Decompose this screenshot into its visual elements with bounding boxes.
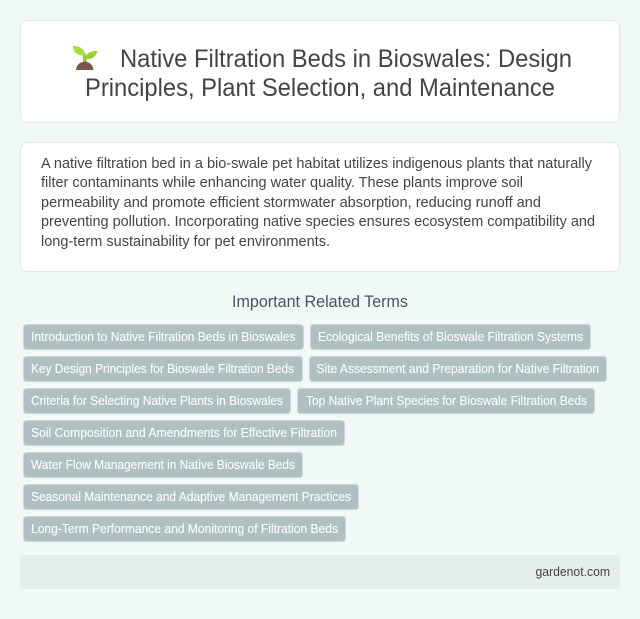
description text: long-term sustainability for pet environments.	[41, 233, 330, 250]
title line 1: Native Filtration Beds in Bioswales: Design	[120, 45, 572, 73]
description text: preventing pollution. Incorporating native species ensures ecosystem compatibility and	[41, 213, 595, 230]
description text: A native filtration bed in a bio-swale pet habitat utilizes indigenous plants that naturally	[41, 155, 592, 172]
description text: permeability and promote efficient stormwater absorption, reducing runoff and	[41, 194, 541, 211]
tag	[310, 356, 606, 382]
tag: Long-Term Performance and Monitoring of Filtration Beds	[31, 521, 338, 536]
footer text: gardenot.com	[536, 564, 610, 579]
tag	[24, 388, 290, 414]
footer bar	[20, 555, 620, 589]
tag	[298, 388, 594, 414]
tag	[24, 452, 302, 478]
tag: Top Native Plant Species for Bioswale Filtration Beds	[306, 393, 587, 408]
tag: Key Design Principles for Bioswale Filtration Beds	[31, 361, 294, 376]
heading: important related terms: Important Related Terms	[232, 293, 408, 311]
tag: Water Flow Management in Native Bioswale Beds	[31, 457, 295, 472]
tag	[310, 324, 590, 350]
panel: term tags	[24, 324, 606, 542]
description text	[41, 155, 595, 250]
tag: Soil Composition and Amendments for Effective Filtration	[31, 425, 337, 440]
tag	[24, 516, 346, 542]
tag: Site Assessment and Preparation for Native Filtration	[316, 361, 599, 376]
tag: Ecological Benefits of Bioswale Filtration Systems	[318, 329, 583, 344]
title line 2: Principles, Plant Selection, and Maintenance	[85, 74, 555, 102]
description text: filter contaminants while enhancing water quality. These plants improve soil	[41, 174, 523, 191]
tag: Criteria for Selecting Native Plants in Bioswales	[31, 393, 283, 408]
tag	[24, 420, 344, 446]
icon: seedling	[73, 46, 98, 70]
tag	[24, 356, 302, 382]
tag: Introduction to Native Filtration Beds in Bioswales	[31, 329, 296, 344]
tag	[24, 324, 304, 350]
tag	[24, 484, 358, 510]
tag: Seasonal Maintenance and Adaptive Management Practices	[31, 489, 351, 504]
panel: description	[20, 142, 620, 272]
panel: title card	[20, 20, 620, 122]
